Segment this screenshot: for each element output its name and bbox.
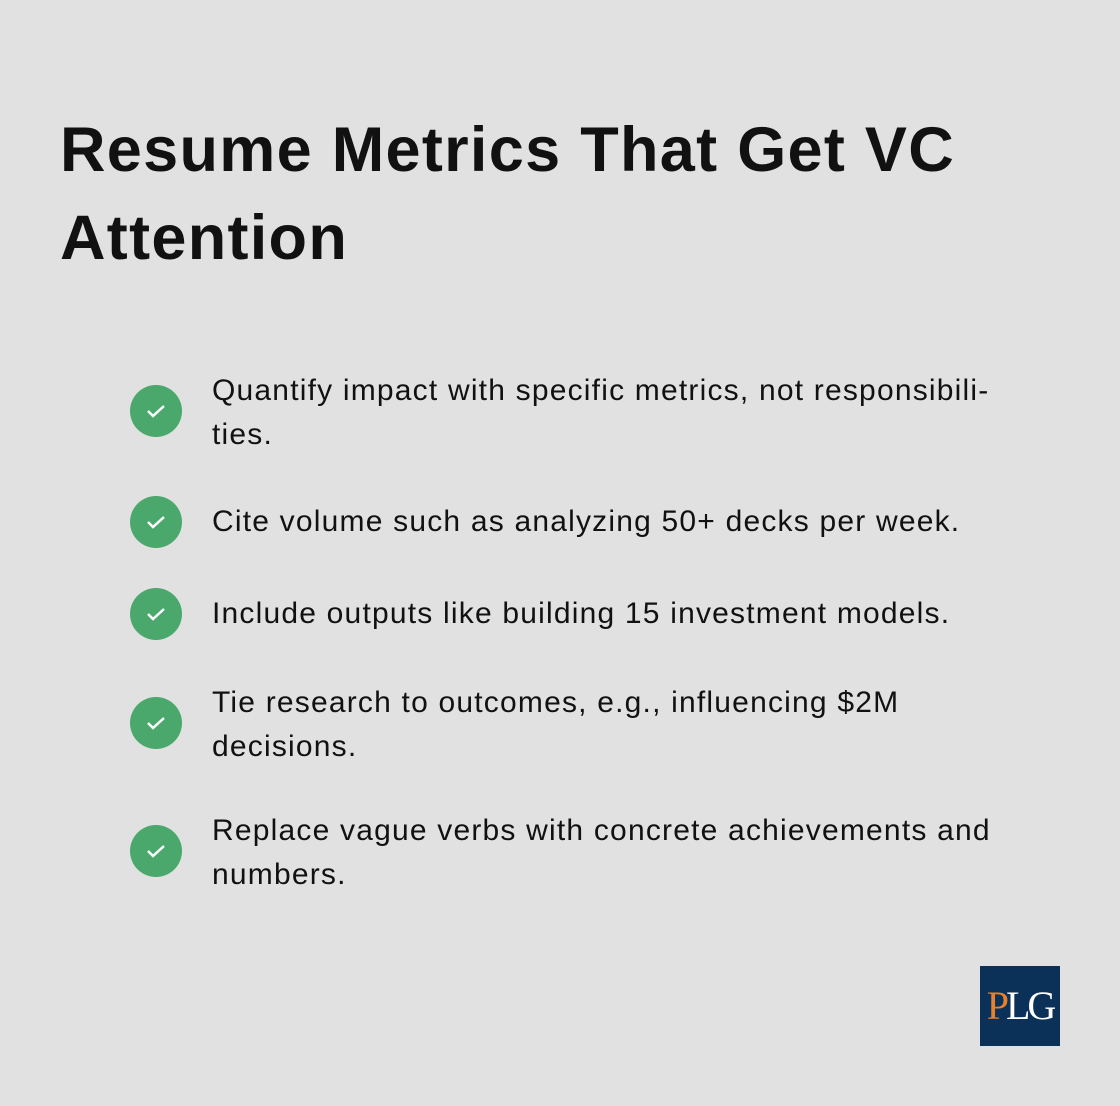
text: Replace vague verbs with concrete achievements and [212, 814, 991, 847]
item 4 [130, 686, 899, 763]
text: Cite volume such as analyzing 50+ decks per week. [212, 505, 960, 538]
text: numbers. [212, 858, 347, 891]
item 3 [130, 588, 950, 640]
text [212, 814, 991, 891]
item 5 [130, 814, 991, 891]
icon: check [130, 588, 182, 640]
icon: check [130, 496, 182, 548]
text: ties. [212, 418, 273, 451]
icon: check [130, 697, 182, 749]
icon: check [130, 385, 182, 437]
title [60, 115, 955, 273]
text [212, 686, 899, 763]
icon: check [130, 825, 182, 877]
text: Include outputs like building 15 investment models. [212, 597, 950, 630]
logo: PLG [987, 983, 1053, 1028]
logo [980, 966, 1060, 1046]
title: Resume Metrics That Get VC [60, 115, 955, 185]
text [212, 374, 989, 451]
text: Tie research to outcomes, e.g., influencing $2M [212, 686, 899, 719]
text: decisions. [212, 730, 357, 763]
title: Attention [60, 203, 348, 273]
item 2 [130, 496, 960, 548]
item 1 [130, 374, 989, 451]
text: Quantify impact with specific metrics, not responsibili- [212, 374, 989, 407]
